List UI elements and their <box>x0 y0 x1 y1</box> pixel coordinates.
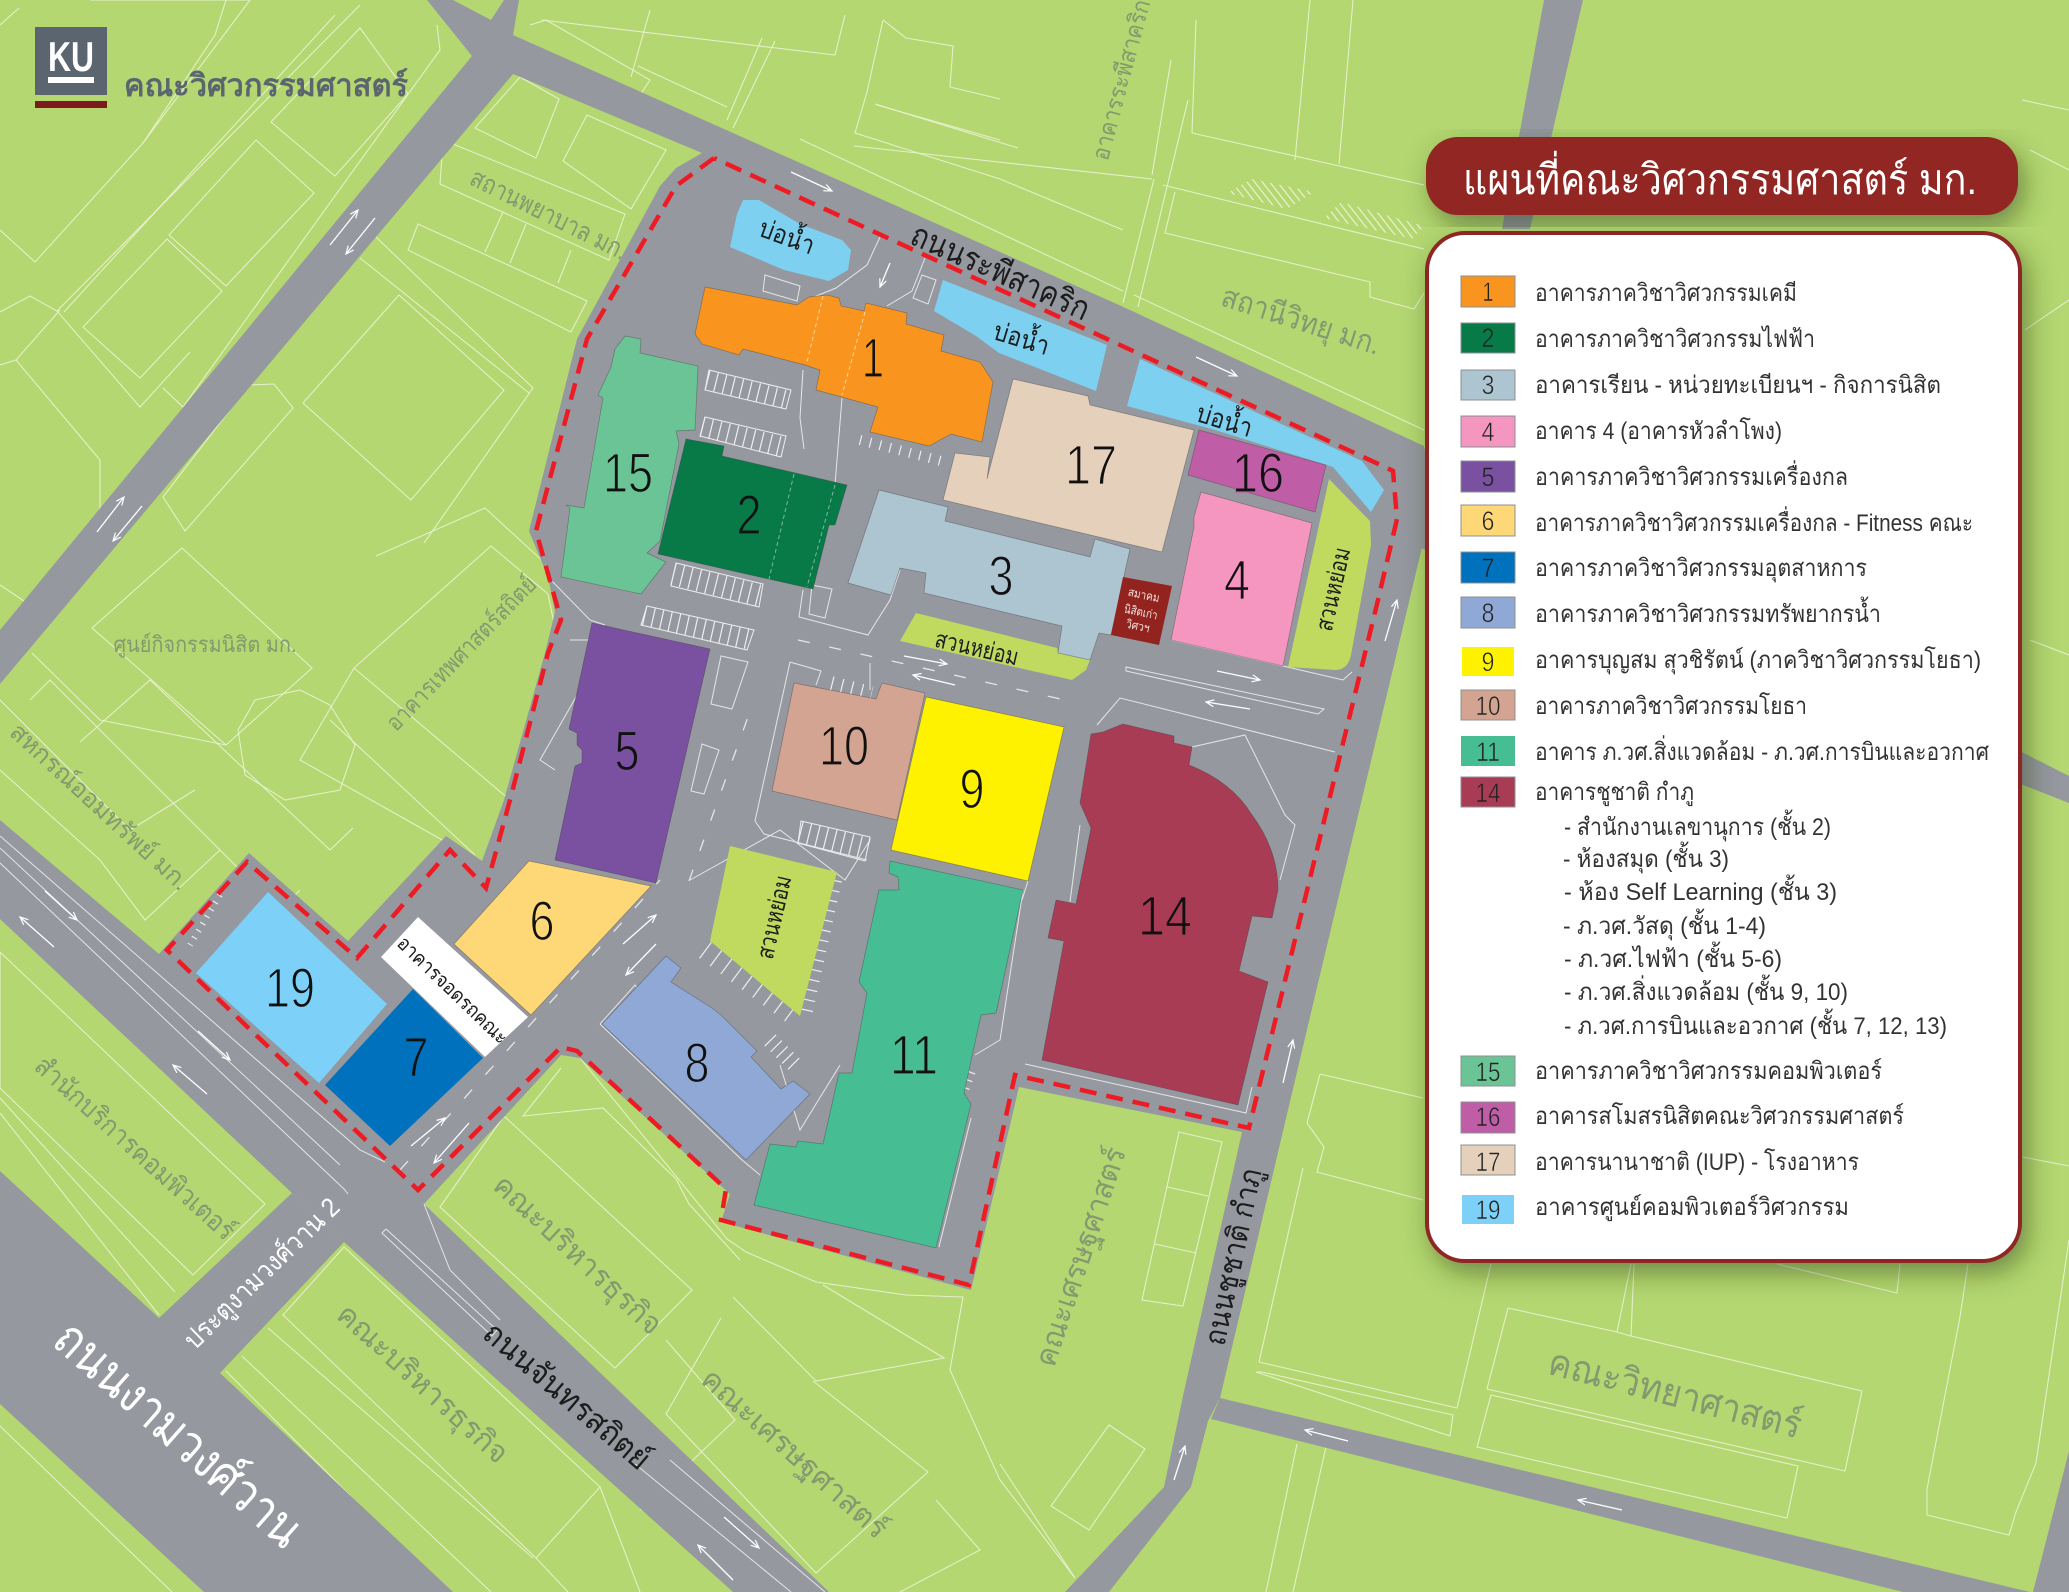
title banner <box>1426 137 2018 215</box>
legend row 11 <box>1461 735 1989 767</box>
legend row 16: 16 <box>1476 1102 1500 1132</box>
pond and garden labels: สวนหย่อม <box>932 626 1021 671</box>
road name labels: ประตูงามวงศ์วาน 2 <box>177 1191 346 1356</box>
legend row 14 with sub-list: - สำนักงานเลขานุการ (ชั้น 2) <box>1564 809 1831 842</box>
legend row 19: อาคารศูนย์คอมพิวเตอร์วิศวกรรม <box>1535 1193 1849 1222</box>
building numbers on map: 2 <box>736 483 762 546</box>
legend row 8: 8 <box>1482 598 1494 628</box>
pond: centre <box>934 280 1107 391</box>
parking bays <box>190 370 1060 1100</box>
legend row 17 <box>1461 1145 1859 1177</box>
building 1 <box>695 287 993 446</box>
building numbers on map: 10 <box>819 714 869 777</box>
legend row 14 with sub-list: - ภ.วศ.วัสดุ (ชั้น 1-4) <box>1563 908 1766 941</box>
legend row 5 <box>1461 460 1848 492</box>
pond and garden labels: อาคารจอดรถคณะ <box>392 932 512 1049</box>
building numbers on map: 1 <box>862 326 884 389</box>
panel: legend <box>1427 233 2020 1261</box>
garden: east <box>1288 479 1371 670</box>
legend row 2: 2 <box>1482 323 1494 353</box>
legend row 15 <box>1461 1056 1882 1087</box>
building numbers on map: 8 <box>684 1031 710 1094</box>
building numbers on map: 19 <box>265 956 315 1019</box>
legend row 11: อาคาร ภ.วศ.สิ่งแวดล้อม - ภ.วศ.การบินและอวกาศ <box>1535 735 1989 766</box>
building 2 section lines <box>769 474 835 587</box>
pond and garden labels: บ่อน้ำ <box>990 312 1054 361</box>
legend row 19 <box>1462 1193 1849 1225</box>
road network: campus grounds, top road and right road <box>0 35 1424 1592</box>
legend row 7 <box>1461 552 1867 583</box>
legend row 9 <box>1462 646 1981 677</box>
parking building <box>381 917 528 1057</box>
place labels on green areas: คณะเศรษฐศาสตร์ <box>694 1362 895 1546</box>
place labels on green areas: ศูนย์กิจกรรมนิสิต มก. <box>114 632 296 658</box>
legend row 1: อาคารภาควิชาวิศวกรรมเคมี <box>1535 280 1797 307</box>
pond and garden labels: บ่อน้ำ <box>1193 394 1257 443</box>
legend row 5: 5 <box>1482 462 1494 492</box>
legend row 16 <box>1461 1102 1904 1133</box>
legend row 14 with sub-list: 14 <box>1476 778 1500 808</box>
legend row 19: 19 <box>1476 1195 1500 1225</box>
building numbers on map: 14 <box>1138 884 1192 947</box>
alumni association label: นิสิตเก่า <box>1123 602 1159 622</box>
legend row 4: อาคาร 4 (อาคารหัวลำโพง) <box>1535 417 1782 445</box>
building 15 <box>561 336 698 594</box>
pond and garden labels: บ่อน้ำ <box>755 209 820 260</box>
pond: east <box>1127 359 1384 512</box>
building 2 <box>658 439 847 589</box>
legend row 10: อาคารภาควิชาวิศวกรรมโยธา <box>1535 692 1807 720</box>
road name labels: ถนนระพีสาคริก <box>905 216 1096 327</box>
road name labels: ถนนจันทรสถิตย์ <box>476 1314 658 1477</box>
road: east road behind panel <box>1400 436 2069 803</box>
legend row 14 with sub-list: - ห้องสมุด (ชั้น 3) <box>1563 841 1729 874</box>
alumni association building <box>1111 577 1172 645</box>
legend row 4: 4 <box>1482 417 1494 447</box>
place labels on green areas: อาคารเทพศาสตร์สถิตย์ <box>380 570 542 737</box>
logo: KU faculty of engineering <box>35 27 408 108</box>
building 4 <box>1171 492 1312 666</box>
legend row 14 with sub-list: - ภ.วศ.การบินและอวกาศ (ชั้น 7, 12, 13) <box>1564 1008 1947 1040</box>
alumni association label: สมาคม <box>1127 585 1161 605</box>
road: SE corner road <box>2033 1451 2069 1592</box>
legend row 9: อาคารบุญสม สุวชิรัตน์ (ภาควิชาวิศวกรรมโยธา) <box>1535 646 1981 675</box>
logo: KU faculty of engineering: คณะวิศวกรรมศาสตร์ <box>124 68 408 103</box>
legend row 11: 11 <box>1476 737 1500 767</box>
road name labels: ถนนชูชาติ กำภู <box>1199 1166 1270 1349</box>
road direction arrows <box>20 172 1622 1580</box>
legend row 14 with sub-list: อาคารชูชาติ กำภู <box>1535 779 1694 807</box>
place labels on green areas: คณะบริหารธุรกิจ <box>329 1298 515 1472</box>
legend row 17: อาคารนานาชาติ (IUP) - โรงอาหาร <box>1535 1148 1859 1176</box>
building numbers on map: 11 <box>890 1023 938 1086</box>
legend row 14 with sub-list: - ภ.วศ.ไฟฟ้า (ชั้น 5-6) <box>1564 941 1782 973</box>
road name labels: ถนนงามวงศ์วาน <box>42 1309 314 1559</box>
legend row 7: อาคารภาควิชาวิศวกรรมอุตสาหการ <box>1535 555 1867 583</box>
building 5 <box>555 623 710 883</box>
building 10 <box>772 683 925 820</box>
road: crossing gate road and Ngamwongwan road <box>0 1171 453 1592</box>
legend row 15: อาคารภาควิชาวิศวกรรมคอมพิวเตอร์ <box>1535 1057 1882 1085</box>
legend row 8 <box>1461 596 1881 628</box>
road: NW diagonal road <box>0 0 519 684</box>
legend row 15: 15 <box>1476 1057 1500 1087</box>
building 19 <box>196 892 387 1083</box>
place labels on green areas: สถานีวิทยุ มก. <box>1217 280 1384 364</box>
road name labels <box>42 216 1270 1559</box>
building 14 <box>1042 724 1278 1105</box>
legend row 6: 6 <box>1482 506 1494 536</box>
building 11 <box>754 861 1023 1248</box>
garden: south <box>710 846 837 1016</box>
pond and garden labels: สวนหย่อม <box>752 873 797 962</box>
alumni association label: วิศวฯ <box>1124 617 1151 635</box>
legend row 2 <box>1461 323 1815 353</box>
legend row 9: 9 <box>1482 647 1494 677</box>
legend row 8: อาคารภาควิชาวิศวกรรมทรัพยากรน้ำ <box>1535 596 1881 628</box>
place labels on green areas: คณะวิทยาศาสตร์ <box>1544 1341 1806 1447</box>
building numbers on map: 7 <box>404 1025 428 1088</box>
building 9 <box>891 697 1064 881</box>
building numbers on map <box>265 326 1284 1094</box>
place labels on green areas: คณะบริหารธุรกิจ <box>485 1169 668 1343</box>
road: east road south of the campus <box>1211 1398 2030 1592</box>
garden: centre <box>900 613 1090 680</box>
building 17 <box>943 379 1194 552</box>
legend row 6: อาคารภาควิชาวิศวกรรมเครื่องกล - Fitness คณะ <box>1535 506 1973 537</box>
building 8 <box>602 956 810 1160</box>
hatch marks at top right <box>1227 179 1424 239</box>
legend row 1: 1 <box>1482 277 1494 307</box>
legend row 5: อาคารภาควิชาวิศวกรรมเครื่องกล <box>1535 460 1848 491</box>
road markings: dashed lane lines <box>400 640 1074 1170</box>
title banner: แผนที่คณะวิศวกรรมศาสตร์ มก. <box>1463 151 1977 203</box>
legend row 14 with sub-list: - ห้อง Self Learning (ชั้น 3) <box>1564 874 1837 906</box>
pond and garden labels <box>392 209 1356 1049</box>
alumni association label <box>1123 585 1161 635</box>
ponds <box>730 200 1384 512</box>
logo: KU faculty of engineering: KU <box>48 33 94 80</box>
building 6 <box>454 861 651 1015</box>
pond: north-west <box>730 200 851 281</box>
legend row 14 with sub-list <box>1461 777 1947 1040</box>
building numbers on map: 6 <box>530 889 554 952</box>
legend row 7: 7 <box>1482 553 1494 583</box>
place labels on green areas: คณะเศรษฐศาสตร์ <box>1028 1143 1134 1371</box>
legend row 10 <box>1461 690 1807 721</box>
legend row 10: 10 <box>1476 691 1500 721</box>
legend row 17: 17 <box>1476 1147 1500 1177</box>
building numbers on map: 9 <box>960 757 984 820</box>
place labels on green areas: สหกรณ์ออมทรัพย์ มก. <box>4 718 195 896</box>
campus boundary: red dashed line <box>167 158 1397 1285</box>
building numbers on map: 3 <box>988 544 1014 607</box>
building numbers on map: 16 <box>1232 441 1284 504</box>
legend row 4 <box>1461 416 1782 447</box>
place labels on green areas: สถานพยาบาล มก. <box>465 162 633 266</box>
building numbers on map: 4 <box>1224 548 1250 611</box>
building numbers on map: 15 <box>603 441 653 504</box>
building 16 <box>1188 430 1326 512</box>
place labels on green areas: สำนักบริการคอมพิวเตอร์ <box>29 1050 242 1246</box>
building 7 <box>325 989 483 1146</box>
building 1 section lines <box>807 296 865 395</box>
legend row 16: อาคารสโมสรนิสิตคณะวิศวกรรมศาสตร์ <box>1535 1102 1904 1130</box>
legend row 1 <box>1461 276 1797 307</box>
pond and garden labels: สวนหย่อม <box>1311 545 1356 634</box>
building numbers on map: 5 <box>614 719 640 782</box>
road: north road behind title <box>1502 0 1583 229</box>
legend row 3: อาคารเรียน - หน่วยทะเบียนฯ - กิจการนิสิต <box>1535 372 1941 399</box>
legend row 14 with sub-list: - ภ.วศ.สิ่งแวดล้อม (ชั้น 9, 10) <box>1564 974 1848 1006</box>
legend row 6 <box>1461 505 1973 537</box>
road markings: curbs and medians <box>0 237 1352 1592</box>
building numbers on map: 17 <box>1065 433 1117 496</box>
legend row 2: อาคารภาควิชาวิศวกรรมไฟฟ้า <box>1535 325 1815 353</box>
building 3 <box>848 490 1130 660</box>
legend row 3: 3 <box>1482 370 1494 400</box>
